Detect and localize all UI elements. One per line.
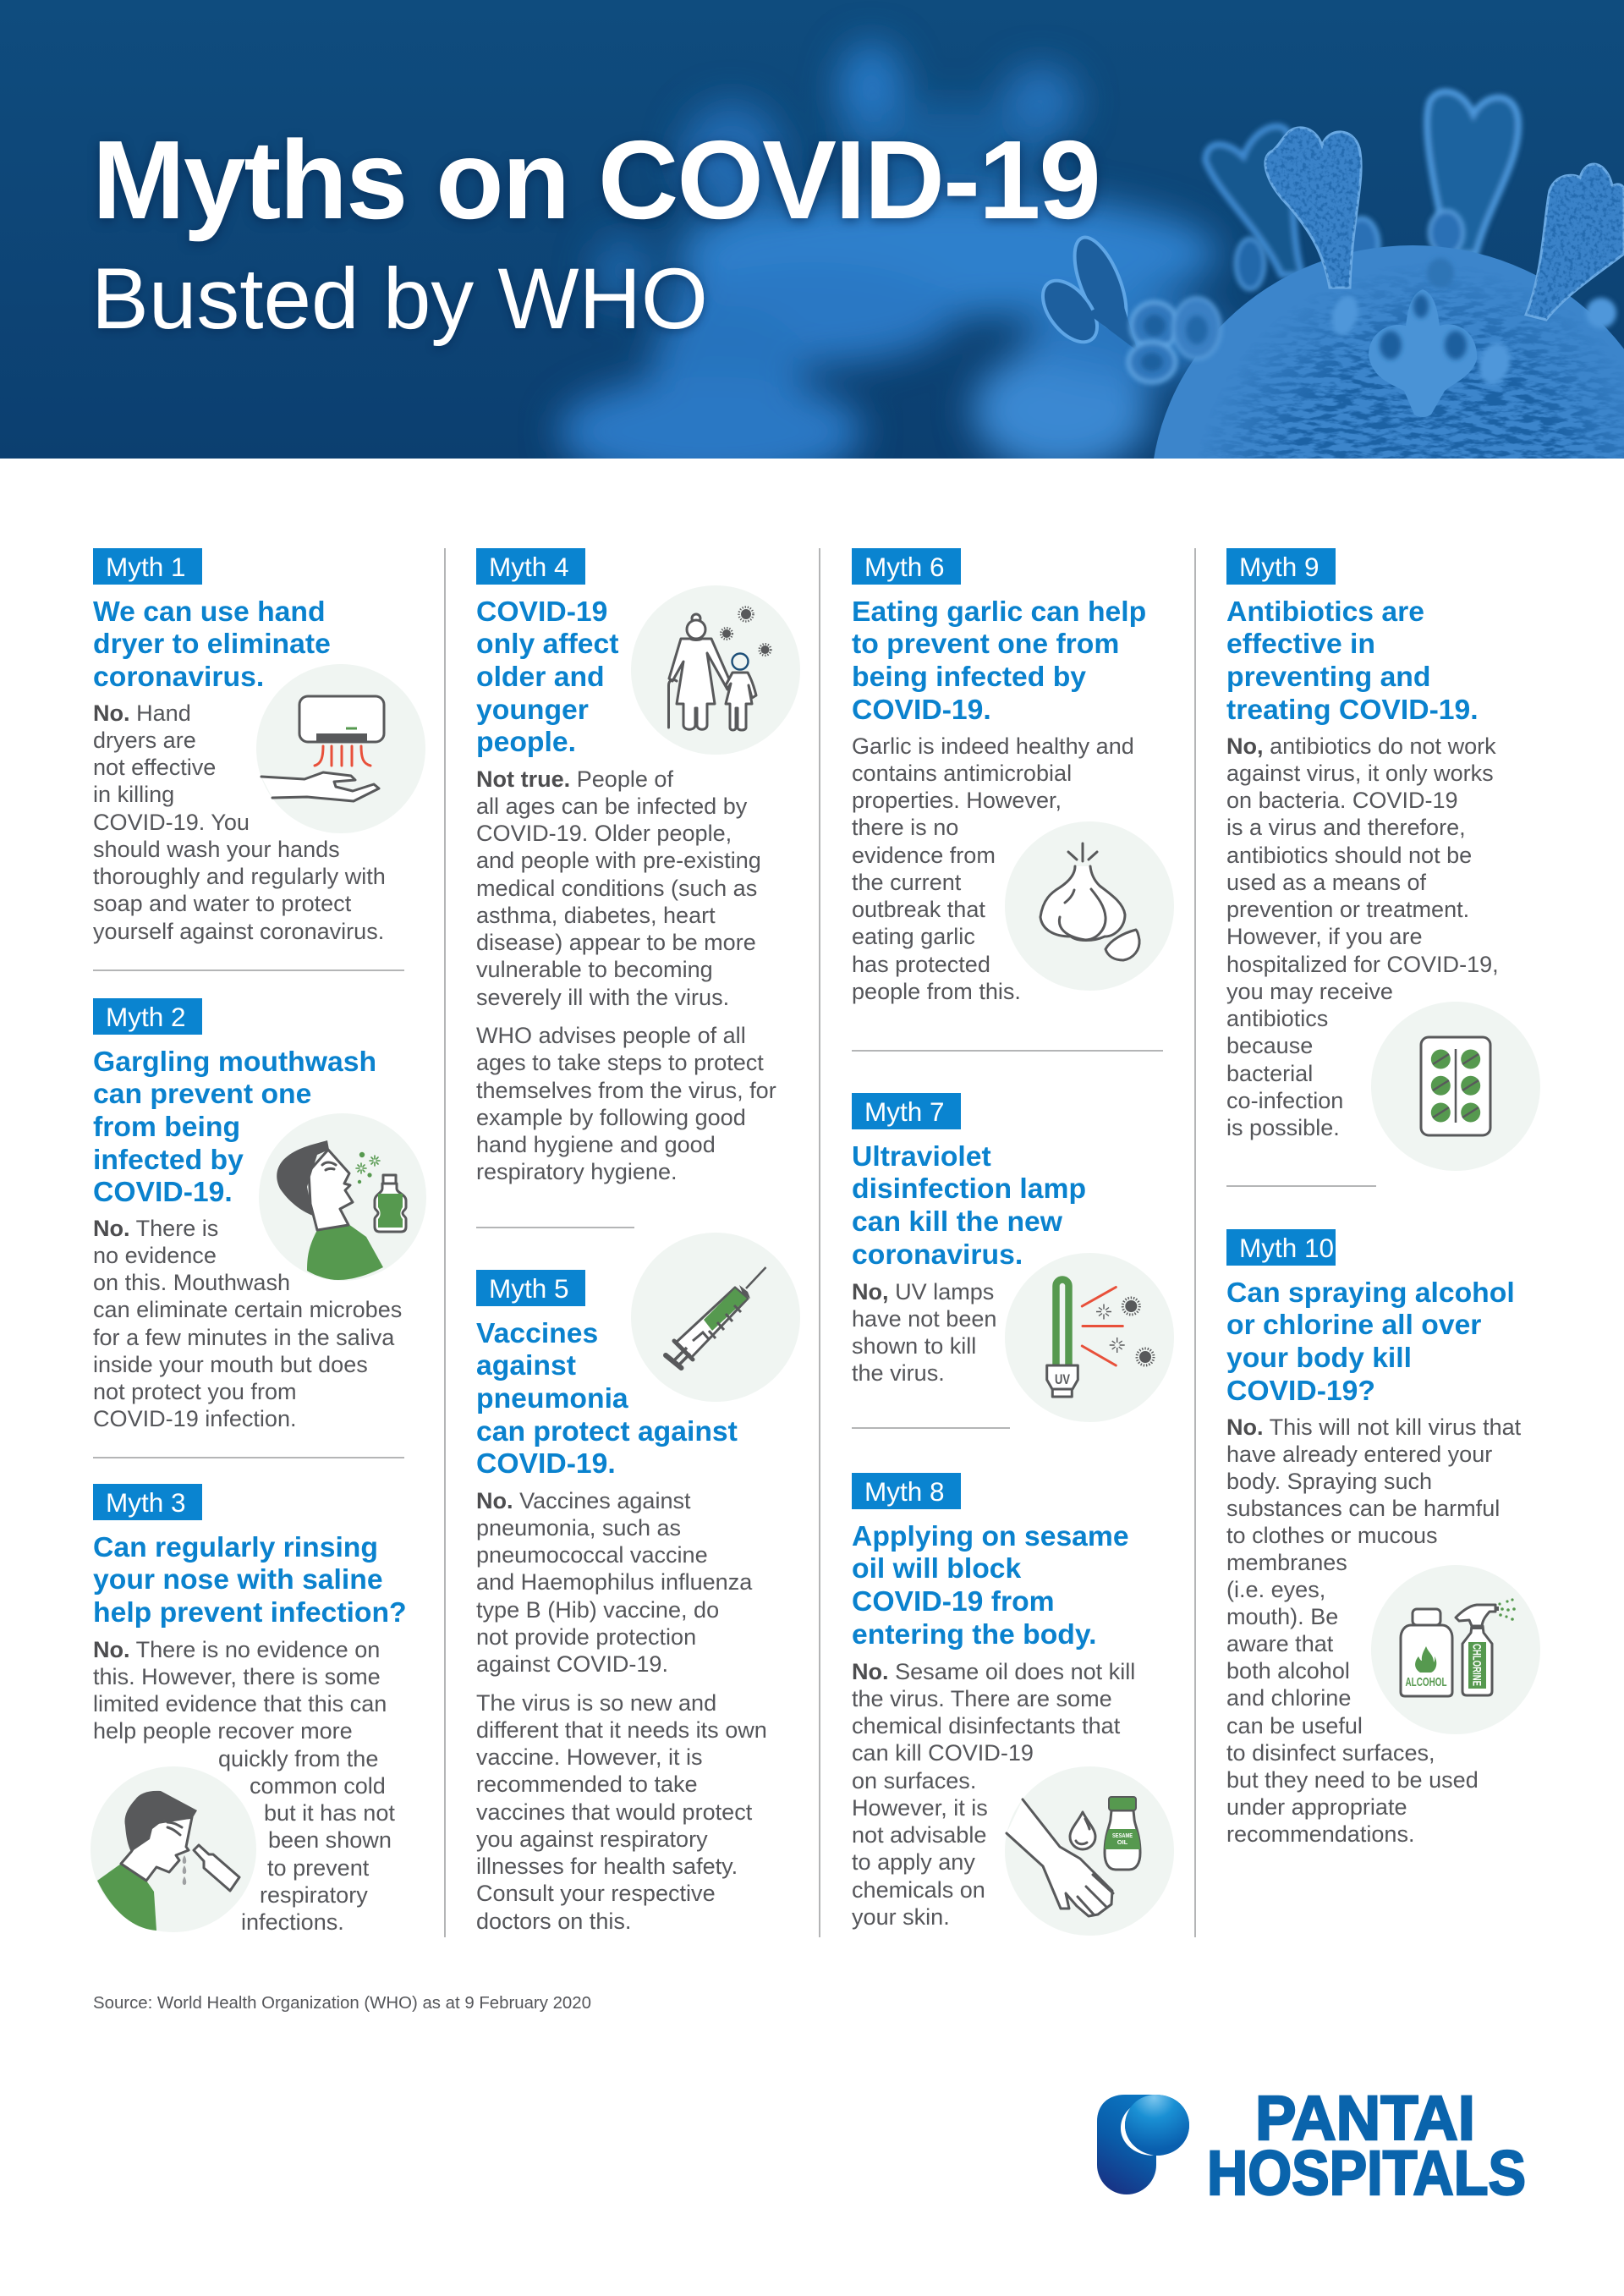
myth 6 text: evidence from bbox=[852, 843, 996, 868]
myth 3 text: to prevent bbox=[267, 1854, 369, 1880]
myth 4 advice text: respiratory hygiene. bbox=[476, 1159, 678, 1184]
myth 9 tag: Myth 9 bbox=[1239, 552, 1320, 582]
myth 5 tag bbox=[476, 1270, 585, 1306]
myth 5 text: against COVID-19. bbox=[476, 1651, 668, 1677]
myth 6 text: has protected bbox=[852, 951, 990, 976]
myth 10 text: both alcohol bbox=[1226, 1658, 1350, 1684]
icon: elderly woman and child bbox=[631, 585, 800, 755]
myth 9 text: co-infection bbox=[1226, 1088, 1343, 1113]
myth 6 text: people from this. bbox=[852, 979, 1021, 1004]
myth 2 text bbox=[93, 1215, 402, 1431]
myth 2 heading: infected by bbox=[93, 1144, 244, 1176]
myth 3 text: been shown bbox=[268, 1827, 392, 1853]
myth 5 text: and Haemophilus influenza bbox=[476, 1569, 752, 1595]
myth 2 text: not protect you from bbox=[93, 1379, 297, 1404]
myth 5 heading bbox=[476, 1316, 738, 1480]
myth 10 heading: or chlorine all over bbox=[1226, 1309, 1481, 1341]
myth 9 heading bbox=[1226, 596, 1479, 726]
myth 5 advice text: illnesses for health safety. bbox=[476, 1854, 738, 1879]
myth 1 text: dryers are bbox=[93, 728, 196, 753]
myth 6 text: the current bbox=[852, 870, 961, 895]
myth 9 text: because bbox=[1226, 1033, 1313, 1058]
myth 8 text: to apply any bbox=[852, 1849, 975, 1875]
myth 9 text: antibiotics should not be bbox=[1226, 843, 1472, 868]
myth 6 text: there is no bbox=[852, 815, 958, 840]
myth 8 heading: COVID-19 from bbox=[852, 1585, 1055, 1618]
myth 1 text: thoroughly and regularly with bbox=[93, 864, 386, 889]
myth 5 tag: Myth 5 bbox=[489, 1273, 569, 1304]
myth 4 advice text: ages to take steps to protect bbox=[476, 1050, 764, 1075]
myth 9 text: antibiotics bbox=[1226, 1006, 1328, 1031]
myth 9 heading: treating COVID-19. bbox=[1226, 694, 1479, 726]
myth 4 text bbox=[476, 766, 761, 1010]
myth 10 text: can be useful bbox=[1226, 1713, 1363, 1738]
myth 3 heading bbox=[93, 1531, 407, 1629]
myth 7 text bbox=[852, 1279, 996, 1386]
myth 1 text: in killing bbox=[93, 782, 174, 807]
myth 9 text: No, antibiotics do not work bbox=[1226, 733, 1496, 758]
myth 8 text bbox=[852, 1658, 1135, 1930]
myth 7 heading bbox=[852, 1140, 1086, 1271]
myth 10 text: substances can be harmful bbox=[1226, 1496, 1500, 1521]
myth 1 heading: dryer to eliminate bbox=[93, 628, 331, 660]
myth 8 heading: Applying on sesame bbox=[852, 1519, 1129, 1552]
myth 9 text: However, if you are bbox=[1226, 924, 1423, 949]
myth 7 tag: Myth 7 bbox=[864, 1096, 945, 1127]
myth 10 text bbox=[1226, 1413, 1521, 1848]
myth 10 heading: COVID-19? bbox=[1226, 1375, 1375, 1407]
myth 5 advice text: vaccines that would protect bbox=[476, 1799, 752, 1824]
myth 1 tag: Myth 1 bbox=[106, 552, 186, 582]
myth 8 tag bbox=[852, 1473, 961, 1509]
myth 10 text: but they need to be used bbox=[1226, 1767, 1479, 1793]
myth 5 text bbox=[476, 1487, 753, 1677]
myth 10 text: and chlorine bbox=[1226, 1685, 1351, 1711]
myth 7 text: the virus. bbox=[852, 1360, 945, 1386]
myth 1 text: soap and water to protect bbox=[93, 891, 351, 916]
myth 7 text: No, UV lamps bbox=[852, 1279, 994, 1305]
myth 9 heading: Antibiotics are bbox=[1226, 596, 1424, 628]
myth 10 text: (i.e. eyes, bbox=[1226, 1577, 1325, 1602]
myth 7 heading: Ultraviolet bbox=[852, 1140, 991, 1173]
myth 2 tag: Myth 2 bbox=[106, 1002, 186, 1032]
myth 5 advice text: Consult your respective bbox=[476, 1881, 716, 1906]
icon: hand dryer bbox=[256, 664, 425, 833]
myth 4 text: COVID-19. Older people, bbox=[476, 821, 732, 846]
myth 5 heading: Vaccines bbox=[476, 1316, 598, 1348]
myth 4 text: disease) appear to be more bbox=[476, 930, 756, 955]
myth 3 text: No. There is no evidence on bbox=[93, 1636, 380, 1662]
myth 4 advice text: WHO advises people of all bbox=[476, 1023, 746, 1048]
myth 5 text: pneumonia, such as bbox=[476, 1515, 681, 1541]
myth 2 heading: COVID-19. bbox=[93, 1176, 233, 1208]
myth 10 text: to clothes or mucous bbox=[1226, 1523, 1438, 1548]
myth 2 text: inside your mouth but does bbox=[93, 1352, 368, 1377]
myth 9 heading: preventing and bbox=[1226, 661, 1430, 693]
myth 4 advice text bbox=[476, 1023, 776, 1184]
icon: man using nasal spray bbox=[91, 1766, 256, 1932]
myth 4 heading: people. bbox=[476, 726, 576, 758]
myth 9 text: used as a means of bbox=[1226, 870, 1426, 895]
myth 9 text: is possible. bbox=[1226, 1115, 1340, 1140]
myth 1 text: COVID-19. You bbox=[93, 809, 250, 834]
myth 6 text bbox=[852, 733, 1134, 1004]
myth 4 advice text: example by following good bbox=[476, 1105, 746, 1130]
myth 2 heading: can prevent one bbox=[93, 1078, 311, 1110]
icon: garlic bbox=[1005, 821, 1174, 991]
myth 2 text: on this. Mouthwash bbox=[93, 1270, 290, 1295]
myth 4 text: medical conditions (such as bbox=[476, 875, 757, 900]
myth 6 heading: being infected by bbox=[852, 661, 1086, 693]
myth 10 heading: Can spraying alcohol bbox=[1226, 1276, 1515, 1308]
myth 10 heading bbox=[1226, 1276, 1515, 1407]
panel: myth 8 bbox=[852, 1473, 1174, 1936]
myth 9 text: bacterial bbox=[1226, 1061, 1313, 1086]
myth 9 heading: effective in bbox=[1226, 628, 1375, 660]
header banner with virus image bbox=[0, 0, 1624, 459]
myth 9 text: you may receive bbox=[1226, 979, 1393, 1004]
icon: man gargling mouthwash bbox=[259, 1113, 426, 1281]
myth 4 heading bbox=[476, 596, 619, 758]
myth 9 text bbox=[1226, 733, 1499, 1141]
logo: Pantai Hospitals bbox=[1083, 2081, 1539, 2208]
icon: alcohol and chlorine bottles: CHLORINE bbox=[1470, 1644, 1484, 1686]
myth 1 heading: We can use hand bbox=[93, 596, 326, 628]
myth 4 heading: older and bbox=[476, 661, 605, 693]
myth 2 text: COVID-19 infection. bbox=[93, 1406, 297, 1431]
myth 5 heading: can protect against bbox=[476, 1415, 738, 1447]
icon: alcohol and chlorine bottles bbox=[1371, 1565, 1540, 1734]
myth 3 heading: Can regularly rinsing bbox=[93, 1531, 378, 1563]
myth 10 text: No. This will not kill virus that bbox=[1226, 1414, 1521, 1440]
panel: myth 5 bbox=[476, 1233, 800, 1934]
myth 10 tag: Myth 10 bbox=[1239, 1233, 1334, 1263]
myth 2 text: can eliminate certain microbes bbox=[93, 1297, 402, 1322]
myth 3 text: respiratory bbox=[260, 1882, 368, 1908]
panel: myth 6 bbox=[852, 548, 1174, 1004]
panel: myth 3 bbox=[91, 1484, 407, 1935]
myth 1 tag bbox=[93, 548, 202, 585]
icon: sesame oil on arm: OIL bbox=[1117, 1838, 1128, 1846]
myth 4 text: asthma, diabetes, heart bbox=[476, 903, 716, 928]
myth 8 text: chemicals on bbox=[852, 1876, 985, 1902]
myth 5 advice text: different that it needs its own bbox=[476, 1717, 767, 1743]
myth 2 text: No. There is bbox=[93, 1215, 218, 1240]
myth 8 text: can kill COVID-19 bbox=[852, 1740, 1034, 1766]
icon: sesame oil on arm: SESAME bbox=[1112, 1832, 1133, 1839]
myth 3 heading: help prevent infection? bbox=[93, 1596, 407, 1629]
myth 8 text: not advisable bbox=[852, 1822, 986, 1848]
myth 5 heading: pneumonia bbox=[476, 1382, 628, 1414]
panel: myth 9 bbox=[1226, 548, 1540, 1171]
myth 2 heading bbox=[93, 1046, 376, 1208]
myth 9 text: against virus, it only works bbox=[1226, 761, 1494, 786]
myth 3 text: common cold bbox=[250, 1773, 386, 1799]
myth 10 text: mouth). Be bbox=[1226, 1604, 1338, 1629]
myth 3 text: infections. bbox=[241, 1909, 344, 1935]
myth 8 tag: Myth 8 bbox=[864, 1476, 945, 1507]
myth 10 text: recommendations. bbox=[1226, 1821, 1414, 1847]
myth 9 tag bbox=[1226, 548, 1336, 585]
myth 4 heading: COVID-19 bbox=[476, 596, 607, 628]
panel: myth 4 bbox=[476, 548, 800, 1184]
title: Myths on COVID-19 bbox=[92, 118, 1100, 242]
myth 8 heading bbox=[852, 1519, 1129, 1651]
myth 10 text: have already entered your bbox=[1226, 1442, 1492, 1467]
myth 1 heading: coronavirus. bbox=[93, 661, 264, 693]
myth 2 tag bbox=[93, 998, 202, 1035]
icon: UV lamp: UV bbox=[1055, 1371, 1070, 1387]
myth 8 text: on surfaces. bbox=[852, 1768, 976, 1793]
myth 8 text: your skin. bbox=[852, 1904, 950, 1930]
myth 3 text: quickly from the bbox=[218, 1746, 378, 1771]
myth 6 heading bbox=[852, 596, 1146, 726]
myth 1 text: not effective bbox=[93, 755, 216, 780]
myth 8 text: the virus. There are some bbox=[852, 1686, 1112, 1711]
icon: syringe bbox=[631, 1233, 800, 1402]
myth 5 text: pneumococcal vaccine bbox=[476, 1542, 708, 1568]
myth 3 text: limited evidence that this can bbox=[93, 1691, 387, 1717]
myth 10 text: aware that bbox=[1226, 1631, 1333, 1656]
panel: myth 1 bbox=[93, 548, 425, 944]
myth 6 tag: Myth 6 bbox=[864, 552, 945, 582]
myth 10 text: to disinfect surfaces, bbox=[1226, 1740, 1435, 1766]
panel: myth 2 bbox=[93, 998, 426, 1431]
myth 5 text: No. Vaccines against bbox=[476, 1487, 691, 1513]
myth 4 tag bbox=[476, 548, 585, 585]
myth 5 advice text bbox=[476, 1690, 767, 1934]
myth 3 tag bbox=[93, 1484, 202, 1520]
myth 3 text: but it has not bbox=[264, 1800, 395, 1826]
myth 6 text: properties. However, bbox=[852, 788, 1062, 813]
myth 5 advice text: The virus is so new and bbox=[476, 1690, 716, 1716]
source note: Source: World Health Organization (WHO) as at 9 February 2020 bbox=[93, 1994, 591, 2013]
myth 9 text: on bacteria. COVID-19 bbox=[1226, 788, 1458, 813]
myth 1 text: should wash your hands bbox=[93, 837, 340, 862]
subtitle: Busted by WHO bbox=[91, 250, 708, 347]
myth 8 heading: oil will block bbox=[852, 1552, 1021, 1585]
myth 5 advice text: you against respiratory bbox=[476, 1826, 708, 1852]
panel: myth 10 bbox=[1226, 1229, 1540, 1845]
myth 8 heading: entering the body. bbox=[852, 1618, 1096, 1651]
myth 6 heading: Eating garlic can help bbox=[852, 596, 1146, 628]
myth 3 heading: your nose with saline bbox=[93, 1563, 383, 1596]
myth 8 text: chemical disinfectants that bbox=[852, 1713, 1120, 1738]
myth 4 text: and people with pre-existing bbox=[476, 848, 761, 873]
myth 6 text: eating garlic bbox=[852, 924, 975, 949]
myth 2 heading: Gargling mouthwash bbox=[93, 1046, 376, 1078]
myth 6 heading: COVID-19. bbox=[852, 694, 991, 726]
myth 1 text bbox=[93, 700, 386, 944]
icon: alcohol and chlorine bottles: ALCOHOL bbox=[1406, 1675, 1446, 1689]
myth 4 text: Not true. People of bbox=[476, 766, 673, 792]
myth 5 advice text: vaccine. However, it is bbox=[476, 1744, 703, 1770]
myth 5 text: not provide protection bbox=[476, 1624, 696, 1650]
myth 2 heading: from being bbox=[93, 1111, 240, 1143]
myth 10 text: body. Spraying such bbox=[1226, 1469, 1432, 1494]
myth 6 text: contains antimicrobial bbox=[852, 761, 1072, 786]
myth 5 advice text: doctors on this. bbox=[476, 1909, 631, 1934]
myth 7 text: have not been bbox=[852, 1306, 996, 1332]
myth 6 tag bbox=[852, 548, 961, 585]
myth 4 advice text: hand hygiene and good bbox=[476, 1132, 716, 1157]
myth 4 text: vulnerable to becoming bbox=[476, 957, 713, 982]
myth 4 text: all ages can be infected by bbox=[476, 794, 747, 819]
myth 9 text: prevention or treatment. bbox=[1226, 897, 1469, 922]
myth 2 text: for a few minutes in the saliva bbox=[93, 1325, 394, 1350]
myth 6 heading: to prevent one from bbox=[852, 628, 1119, 660]
myth 4 tag: Myth 4 bbox=[489, 552, 569, 582]
myth 4 text: severely ill with the virus. bbox=[476, 985, 729, 1010]
myth 9 text: hospitalized for COVID-19, bbox=[1226, 951, 1499, 976]
myth 6 text: outbreak that bbox=[852, 897, 985, 922]
myth 1 text: yourself against coronavirus. bbox=[93, 919, 384, 944]
myth 7 heading: coronavirus. bbox=[852, 1239, 1023, 1271]
myth 4 heading: younger bbox=[476, 694, 589, 726]
myth 5 heading: COVID-19. bbox=[476, 1447, 616, 1480]
myth 9 text: is a virus and therefore, bbox=[1226, 815, 1466, 840]
myth 4 advice text: themselves from the virus, for bbox=[476, 1078, 776, 1103]
myth 1 heading bbox=[93, 596, 331, 693]
myth 10 text: membranes bbox=[1226, 1550, 1347, 1575]
myth 6 text: Garlic is indeed healthy and bbox=[852, 733, 1134, 758]
myth 3 text: help people recover more bbox=[93, 1718, 353, 1744]
myth 7 heading: can kill the new bbox=[852, 1206, 1062, 1238]
logo: Pantai Hospitals: PANTAI bbox=[1255, 2083, 1475, 2153]
icon: sesame oil on arm bbox=[1005, 1766, 1174, 1936]
panel: myth 7 bbox=[852, 1093, 1174, 1422]
myth 7 heading: disinfection lamp bbox=[852, 1173, 1086, 1205]
myth 2 text: no evidence bbox=[93, 1243, 217, 1268]
myth 7 text: shown to kill bbox=[852, 1333, 976, 1359]
myth 3 tag: Myth 3 bbox=[106, 1487, 186, 1518]
myth 8 text: No. Sesame oil does not kill bbox=[852, 1658, 1135, 1684]
myth 3 text bbox=[93, 1636, 395, 1935]
myth 8 text: However, it is bbox=[852, 1795, 988, 1821]
icon: UV lamp bbox=[1005, 1253, 1174, 1422]
myth 10 text: under appropriate bbox=[1226, 1794, 1407, 1820]
myth 5 heading: against bbox=[476, 1349, 576, 1381]
myth 7 tag bbox=[852, 1093, 961, 1129]
myth 1 text: No. Hand bbox=[93, 700, 191, 726]
myth 5 advice text: recommended to take bbox=[476, 1771, 698, 1797]
myth 3 text: this. However, there is some bbox=[93, 1664, 381, 1689]
icon: antibiotic pills bbox=[1371, 1002, 1540, 1171]
myth 10 heading: your body kill bbox=[1226, 1342, 1412, 1374]
myth 4 heading: only affect bbox=[476, 628, 618, 660]
myth 5 text: type B (Hib) vaccine, do bbox=[476, 1597, 719, 1623]
